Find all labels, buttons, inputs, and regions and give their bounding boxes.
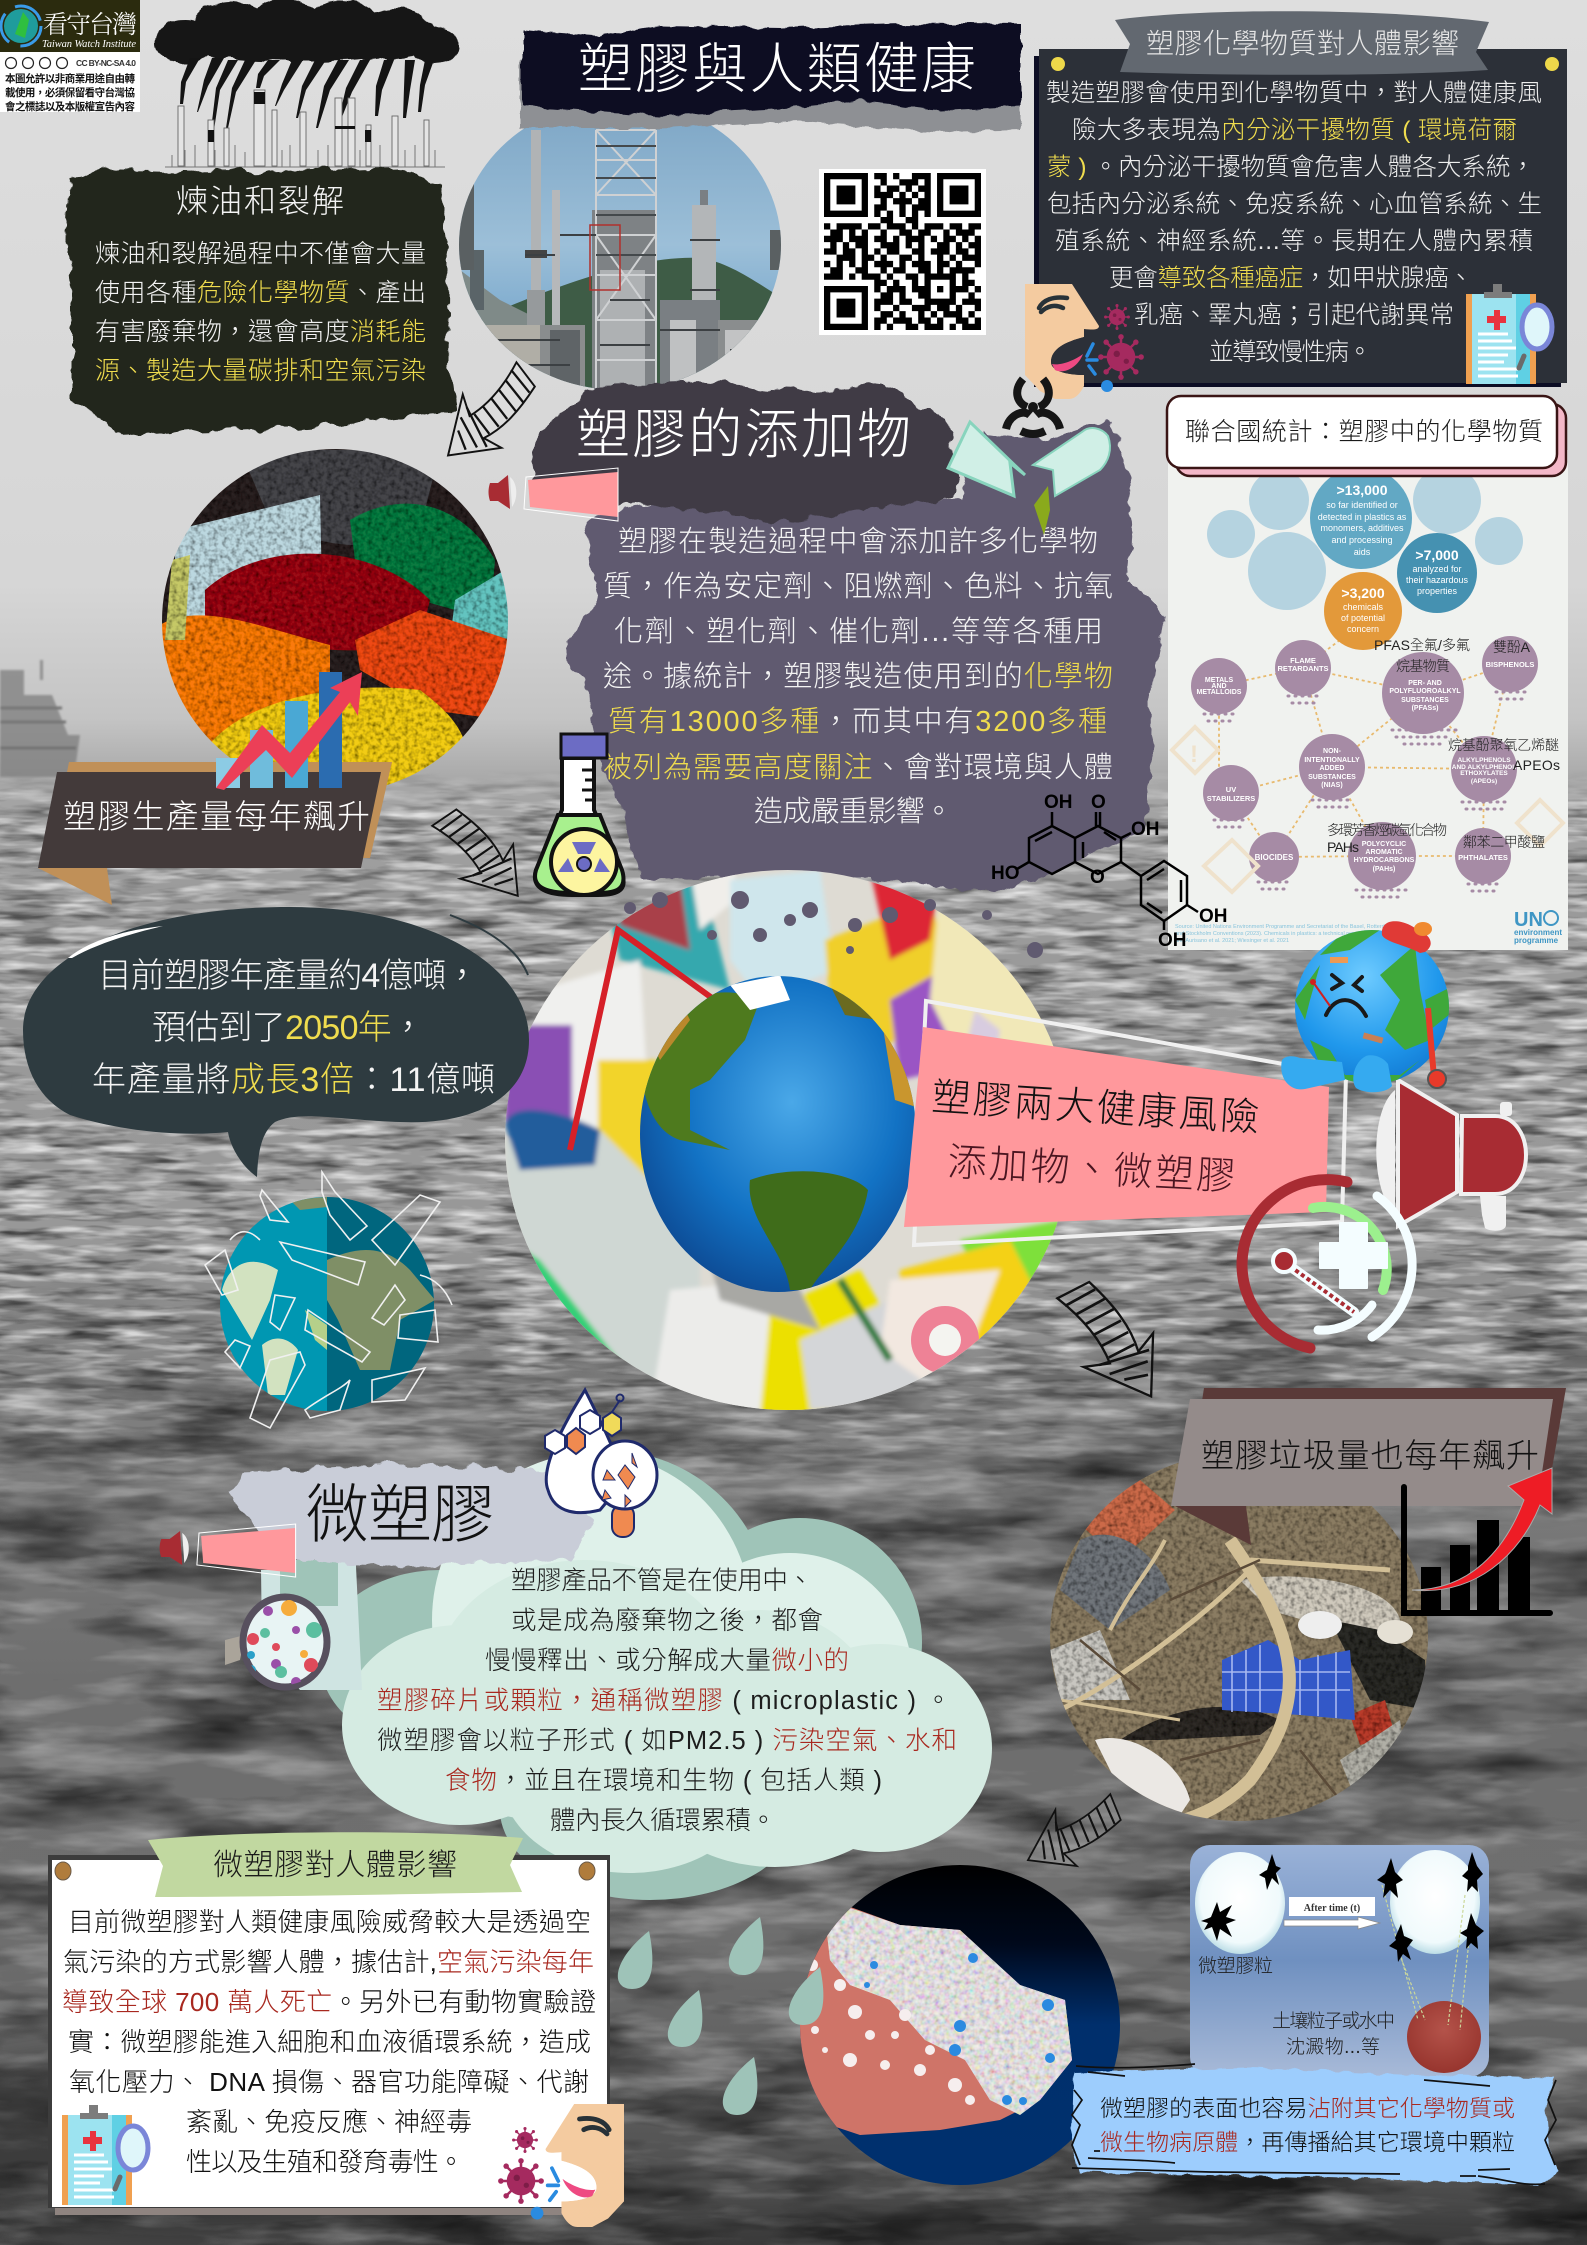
logo and licence block: CC BY-NC-SA 4.0 xyxy=(76,58,136,68)
body text: 包括內分泌系統、免疫系統、心血管系統、生 xyxy=(1047,190,1542,218)
ribbon heading xyxy=(148,1832,523,1897)
body text: 慢慢釋出、或分解成大量微小的 xyxy=(485,1647,849,1675)
text box: refining and cracking xyxy=(66,167,456,436)
labels: 微塑膠粒 xyxy=(1198,1955,1273,1977)
body text: 化劑、塑化劑、催化劑...等等各種用 xyxy=(614,615,1103,648)
ribbon heading: 塑膠化學物質對人體影響 xyxy=(1146,28,1459,59)
cloud shape xyxy=(320,1450,992,1900)
icon: clipboard and magnifier xyxy=(1466,284,1552,384)
factory chimneys with black smoke xyxy=(155,0,459,167)
labels xyxy=(1198,1955,1395,2058)
flavonoid chemical structure xyxy=(991,792,1228,951)
chart: connected chemical bubbles: PHTHALATES xyxy=(1458,853,1508,862)
plastic waste photo with earth xyxy=(500,865,1080,1415)
chart: connected chemical bubbles: (PFASs) xyxy=(1412,705,1438,712)
flavonoid chemical structure: OH xyxy=(1199,906,1228,927)
megaphone: additive title xyxy=(488,468,618,521)
banner: plastic production rising: 塑膠生產量每年飆升 xyxy=(63,798,370,835)
text box: refining and cracking: 煉油和裂解過程中不僅會大量 xyxy=(95,240,426,268)
Chinese annotations on the chart: 烷基酚聚氧乙烯醚 xyxy=(1448,737,1559,753)
labels: 土壤粒子或水中 xyxy=(1272,2010,1395,2032)
callout: two major health risks: 添加物、微塑膠 xyxy=(947,1141,1236,1199)
label: after time: After time (t) xyxy=(1304,1903,1360,1914)
Chinese annotations on the chart: APEOs xyxy=(1513,757,1560,773)
body text: 更會導致各種癌症，如甲狀腺癌、 xyxy=(1109,264,1473,292)
chart: connected chemical bubbles: UV xyxy=(1226,785,1236,794)
flavonoid chemical structure: O xyxy=(1091,792,1106,813)
chart: connected chemical bubbles: (APEOs) xyxy=(1471,778,1497,785)
icon: flask with radiation sign xyxy=(535,734,624,895)
body text: 微塑膠會以粒子形式 ( 如PM2.5 ) 污染空氣、水和 xyxy=(377,1727,957,1755)
background ship in fog xyxy=(0,660,80,777)
body text: 或是成為廢棄物之後，都會 xyxy=(511,1607,823,1635)
banner: plastic production rising xyxy=(38,672,392,905)
title banner xyxy=(520,24,1021,132)
chart: connected chemical bubbles: monomers, additives xyxy=(1320,523,1404,533)
callout: two major health risks: 塑膠兩大健康風險 xyxy=(930,1076,1261,1140)
callout: adsorption note: 微塑膠的表面也容易沾附其它化學物質或 xyxy=(1100,2095,1515,2121)
icon: test tube and magnifier with coloured dots xyxy=(225,1560,361,1690)
body text: 氣污染的方式影響人體，據估計,空氣污染每年 xyxy=(63,1947,594,1977)
body text: 紊亂、免疫反應、神經毒 xyxy=(186,2107,472,2137)
icon: virus large xyxy=(1098,334,1144,380)
icon: globe surrounded by plastic outlines xyxy=(205,1172,452,1428)
chart: connected chemical bubbles: ! xyxy=(1190,741,1198,768)
body text xyxy=(377,1567,957,1835)
chart: connected chemical bubbles: POLYCYCLIC xyxy=(1362,841,1406,848)
body text: 塑膠產品不管是在使用中、 xyxy=(511,1567,813,1595)
speech bubble: annual production: 年產量將成長3倍：11億噸 xyxy=(92,1061,495,1099)
brush heading: 微塑膠 xyxy=(305,1479,495,1551)
arrow: pellets to plastic globe xyxy=(420,795,541,916)
flavonoid chemical structure: OH xyxy=(1131,819,1160,840)
body text: 氧化壓力、 DNA 損傷、器官功能障礙、代謝 xyxy=(69,2067,589,2097)
chart: connected chemical bubbles: their hazardous xyxy=(1406,575,1469,585)
chart: connected chemical bubbles: FLAME xyxy=(1290,656,1316,665)
panel: microplastic health effects xyxy=(48,1832,624,2227)
Chinese annotations on the chart: 多環芳香烴碳氫化合物 xyxy=(1327,822,1447,838)
chart: connected chemical bubbles: and processing xyxy=(1331,535,1393,545)
UN logo and source: environment xyxy=(1514,928,1562,937)
UN logo and source xyxy=(1175,909,1562,945)
chart: connected chemical bubbles: METALS xyxy=(1205,677,1233,684)
icon: teal raindrop over photo xyxy=(789,1967,823,2025)
text box: refining and cracking: 源、製造大量碳排和空氣污染 xyxy=(95,357,426,385)
UN logo and source: UN xyxy=(1514,909,1543,931)
banner: plastic garbage rising: 塑膠垃圾量也每年飆升 xyxy=(1201,1437,1539,1474)
chart: connected chemical bubbles: HYDROCARBONS xyxy=(1354,857,1415,864)
logo and licence block xyxy=(0,0,140,113)
flavonoid chemical structure: HO xyxy=(991,863,1020,884)
chart: connected chemical bubbles: >13,000 xyxy=(1336,482,1388,498)
body text: 途。據統計，塑膠製造使用到的化學物 xyxy=(603,660,1113,693)
text box: refining and cracking: 有害廢棄物，還會高度消耗能 xyxy=(95,318,426,346)
panel: refinery and cracking xyxy=(66,95,785,436)
callout: adsorption note: 微生物病原體，再傳播給其它環境中顆粒 xyxy=(1100,2129,1515,2155)
chart: connected chemical bubbles: >7,000 xyxy=(1415,547,1459,563)
body text: 導致全球 700 萬人死亡。另外已有動物實驗證 xyxy=(62,1987,596,2017)
body text: 塑膠碎片或顆粒，通稱微塑膠 ( microplastic ) 。 xyxy=(377,1687,951,1715)
body text: 塑膠在製造過程中會添加許多化學物 xyxy=(618,525,1098,558)
chart: connected chemical bubbles: SUBSTANCES xyxy=(1308,774,1356,781)
Chinese annotations on the chart: 鄰苯二甲酸鹽 xyxy=(1463,834,1545,850)
logo and licence block: 本圖允許以非商業用途自由轉 xyxy=(5,72,136,85)
arrow: refining to pellets xyxy=(426,350,551,479)
chart: connected chemical bubbles: NON- xyxy=(1323,748,1342,755)
chart: connected chemical bubbles: INTENTIONALLY xyxy=(1304,757,1360,764)
icon: coughing face xyxy=(1025,284,1113,399)
icon: clipboard and magnifier xyxy=(62,2105,148,2205)
pellets photo xyxy=(160,445,510,800)
body text: 質有13000多種，而其中有3200多種 xyxy=(608,705,1107,738)
icon: molecules and magnifier xyxy=(545,1390,657,1537)
chart: connected chemical bubbles: POLYFLUOROALKYL xyxy=(1389,688,1461,695)
callout: adsorption note xyxy=(1070,2064,1558,2185)
flavonoid chemical structure: OH xyxy=(1044,792,1072,813)
chart: connected chemical bubbles: (NIAS) xyxy=(1321,782,1343,789)
arrow: plastic to garbage xyxy=(1040,1265,1183,1418)
heading box: 聯合國統計：塑膠中的化學物質 xyxy=(1185,418,1543,446)
panel: health effects of plastic chemicals xyxy=(1025,11,1567,399)
body text: 蒙 ) 。內分泌干擾物質會危害人體各大系統， xyxy=(1047,153,1535,181)
body text xyxy=(603,525,1113,828)
speech bubble: annual production: 預估到了2050年， xyxy=(152,1009,425,1047)
panel: UN chemicals chart xyxy=(1167,396,1568,950)
flavonoid chemical structure: O xyxy=(1090,867,1105,888)
chart: connected chemical bubbles: SUBSTANCES xyxy=(1401,697,1449,704)
text box: refining and cracking: 煉油和裂解 xyxy=(176,183,344,219)
icon: sick earth character xyxy=(1281,921,1455,1095)
chart: connected chemical bubbles: (PAHs) xyxy=(1373,866,1395,873)
banner: plastic garbage rising xyxy=(1171,1388,1566,1613)
UN logo and source: and Aurisano et al. 2021; Wiesinger et al. 2021 xyxy=(1175,938,1289,944)
chart: connected chemical bubbles: so far identified or xyxy=(1326,500,1398,510)
body text: 製造塑膠會使用到化學物質中，對人體健康風 xyxy=(1046,79,1542,107)
body text: 目前微塑膠對人類健康風險威脅較大是透過空 xyxy=(68,1907,591,1937)
ribbon heading xyxy=(1115,11,1489,75)
body text: 造成嚴重影響。 xyxy=(754,795,953,828)
diagram: adsorption on microplastic particle xyxy=(1190,1845,1489,2077)
Chinese annotations on the chart xyxy=(1327,637,1560,855)
icon: rising bar chart xyxy=(216,672,362,790)
body text xyxy=(62,1907,596,2177)
Chinese annotations on the chart: PFAS全氟/多氟 xyxy=(1374,637,1470,653)
chart: connected chemical bubbles: STABILIZERS xyxy=(1207,794,1255,803)
chart: connected chemical bubbles: AROMATIC xyxy=(1365,849,1403,856)
flavonoid chemical structure: OH xyxy=(1158,930,1186,951)
icon: teal raindrops xyxy=(618,1917,763,2115)
chart: connected chemical bubbles: concern xyxy=(1347,624,1379,634)
chart: connected chemical bubbles xyxy=(1172,466,1563,897)
chart: connected chemical bubbles: BIOCIDES xyxy=(1255,853,1294,862)
arrow: after time xyxy=(1284,1917,1380,1929)
chart: connected chemical bubbles: >3,200 xyxy=(1341,585,1385,601)
icon: virus small xyxy=(1104,304,1130,330)
body text: 實：微塑膠能進入細胞和血液循環系統，造成 xyxy=(68,2027,591,2057)
chart: connected chemical bubbles: detected in plastics as xyxy=(1318,512,1407,522)
body text: 性以及生殖和發育毒性。 xyxy=(186,2147,464,2177)
arrow: garbage to microplastic xyxy=(1013,1780,1133,1887)
logo and licence block: Taiwan Watch Institute xyxy=(42,39,136,50)
chart: connected chemical bubbles: of potential xyxy=(1341,613,1385,623)
QR code xyxy=(819,169,986,335)
panel: additive text xyxy=(530,379,1163,895)
icon: virus large xyxy=(498,2158,544,2204)
callout: two major health risks xyxy=(904,1001,1346,1245)
panel: microplastic cloud xyxy=(160,1390,992,1900)
body text: 險大多表現為內分泌干擾物質 ( 環境荷爾 xyxy=(1072,116,1517,144)
body text: 體內長久循環累積。 xyxy=(550,1807,776,1835)
photo: microplastics on a fingertip xyxy=(800,1865,1120,2185)
speech bubble: annual production xyxy=(23,907,529,1177)
pins xyxy=(55,1862,595,1880)
logo and licence block: 會之標誌以及本版權宣告內容 xyxy=(5,100,136,113)
icon: big megaphone xyxy=(1376,1080,1526,1231)
body text: 殖系統、神經系統...等。長期在人體內累積 xyxy=(1055,227,1533,255)
body text: 食物，並且在環境和生物 ( 包括人類 ) xyxy=(445,1767,882,1795)
body text: 被列為需要高度關注、會對環境與人體 xyxy=(603,751,1113,784)
icon: broken test tube xyxy=(948,422,1110,535)
heading box xyxy=(1167,396,1566,476)
title banner: 塑膠與人類健康 xyxy=(578,38,976,100)
Chinese annotations on the chart: 烷基物質 xyxy=(1396,658,1450,674)
UN logo and source: Source: United Nations Environment Programme and Secretariat of the Basel, Rotterdam xyxy=(1175,924,1393,930)
body text: 乳癌、睪丸癌；引起代謝異常 xyxy=(1134,301,1454,329)
ribbon heading: 微塑膠對人體影響 xyxy=(213,1849,457,1882)
chart: connected chemical bubbles: ALKYLPHENOLS xyxy=(1457,757,1511,764)
splatter from additive panel xyxy=(624,871,1043,958)
icon: biohazard symbol xyxy=(1006,379,1060,434)
icon: health ring with thermometer and cross xyxy=(1242,1180,1412,1348)
chart: connected chemical bubbles: METALLOIDS xyxy=(1197,689,1242,696)
icon: virus small xyxy=(512,2127,538,2153)
heading: 塑膠的添加物 xyxy=(576,405,911,465)
speech bubble: annual production: 目前塑膠年產量約4億噸， xyxy=(98,957,479,995)
icon: coughing face xyxy=(531,2104,624,2227)
chart: connected chemical bubbles: ETHOXYLATES xyxy=(1460,770,1508,777)
garbage photo xyxy=(1048,1450,1430,1830)
body text: 質，作為安定劑、阻燃劑、色料、抗氧 xyxy=(603,570,1113,603)
megaphone: microplastic title xyxy=(160,1524,296,1577)
chart: connected chemical bubbles: AND xyxy=(1211,683,1227,690)
photo: refinery towers in a circle xyxy=(459,125,781,388)
chart: connected chemical bubbles: aids xyxy=(1354,547,1371,557)
chart: connected chemical bubbles: PER- AND xyxy=(1408,680,1442,687)
text box: refining and cracking: 使用各種危險化學物質、產出 xyxy=(95,279,426,307)
logo and licence block: 載使用，必須保留看守台灣協 xyxy=(5,86,136,99)
chart: connected chemical bubbles: BISPHENOLS xyxy=(1486,660,1534,669)
Chinese annotations on the chart: 雙酚A xyxy=(1493,639,1531,655)
logo and licence block: 看守台灣 xyxy=(43,11,137,39)
pins xyxy=(1051,57,1559,71)
Chinese annotations on the chart: PAHs xyxy=(1327,839,1359,855)
chart: connected chemical bubbles: properties xyxy=(1417,586,1458,596)
UN logo and source: and Stockholm Conventions (2023). Chemicals in plastics: a technical report. xyxy=(1175,931,1363,937)
icon: trend chart with red arrow xyxy=(1404,1468,1552,1613)
chart: connected chemical bubbles: chemicals xyxy=(1343,602,1384,612)
label: after time xyxy=(1289,1897,1375,1916)
chart: connected chemical bubbles: analyzed for xyxy=(1412,564,1462,574)
body text xyxy=(1046,79,1542,366)
chart: connected chemical bubbles: RETARDANTS xyxy=(1277,664,1329,673)
brush heading xyxy=(228,1465,592,1568)
UN logo and source: programme xyxy=(1514,936,1559,945)
labels: 沈澱物...等 xyxy=(1286,2036,1380,2058)
body text: 並導致慢性病。 xyxy=(1209,338,1372,366)
chart: connected chemical bubbles: ADDED xyxy=(1320,765,1344,772)
chart: connected chemical bubbles: AND ALKYLPHENOL xyxy=(1452,764,1516,771)
